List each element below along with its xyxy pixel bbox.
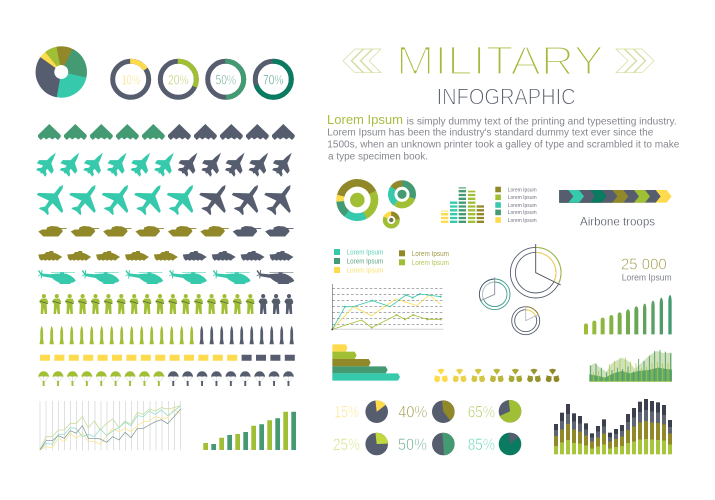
stat: 25 000: 25 000 — [621, 256, 667, 273]
intro paragraph — [327, 112, 680, 163]
line chart legend: Lorem Ipsum — [347, 268, 383, 274]
intro paragraph: Lorem Ipsum has been the industry's standard dummy text ever since the — [327, 128, 654, 139]
stacked arrow bars — [332, 344, 400, 381]
radial gauge: medium — [474, 274, 515, 315]
equalizer legend: Lorem Ipsum — [508, 203, 537, 209]
multi-ring donut: medium — [387, 179, 417, 209]
percent stat: 50%: 50% — [398, 436, 427, 454]
stacked bar chart — [554, 399, 672, 454]
icon row: dark crates — [242, 355, 295, 361]
percent stat: 25%: 25% — [333, 436, 360, 454]
icon row: soldiers — [39, 294, 293, 314]
line chart legend: Lorem Ipsum — [347, 258, 383, 266]
dense area and bar chart — [589, 350, 672, 382]
chart: green rising bars — [203, 412, 296, 450]
icon row: armoured vehicles — [38, 251, 293, 261]
icon row: transport planes — [31, 176, 303, 221]
chevron progress bar — [559, 190, 672, 203]
intro paragraph: 1500s, when an unknown printer took a galley of type and scrambled it to make — [327, 140, 680, 151]
icon row: tanks — [38, 226, 293, 236]
line chart legend: Lorem Ipsum — [412, 251, 449, 258]
arrows: left chevrons — [343, 49, 381, 73]
percent stat: 40%: 40% — [398, 404, 428, 422]
radial gauge: large — [510, 244, 561, 298]
donut 50% — [208, 61, 244, 97]
icon row: missiles — [40, 326, 294, 344]
icon row: fighter jets — [33, 147, 299, 179]
intro paragraph: is simply dummy text of the printing and typesetting industry. — [407, 116, 677, 127]
donut 50%: 50% — [216, 72, 236, 88]
rising missile bars — [584, 295, 672, 334]
equalizer bar chart — [445, 187, 480, 223]
line chart legend: Lorem Ipsum — [412, 260, 449, 267]
percent stat: 40% — [398, 400, 455, 423]
percent stat: 65%: 65% — [468, 404, 495, 422]
line chart legend — [334, 249, 449, 274]
percent stat: 15%: 15% — [334, 404, 359, 422]
equalizer legend: Lorem Ipsum — [508, 187, 537, 193]
percent stat: 65% — [468, 400, 521, 423]
radiation icons row — [434, 369, 559, 382]
intro paragraph: Lorem Ipsum — [327, 112, 403, 127]
icon row: supply crates — [40, 355, 237, 361]
donut 20% — [160, 61, 196, 97]
subtitle: INFOGRAPHIC — [437, 84, 576, 110]
arrows: right chevrons — [616, 49, 654, 73]
stat label: Lorem Ipsum — [622, 273, 672, 283]
equalizer legend: Lorem Ipsum — [508, 210, 537, 216]
donut 70% — [255, 61, 291, 97]
percent stat: 50% — [398, 433, 455, 455]
donut 70%: 70% — [263, 72, 284, 88]
percent stat: 25% — [333, 433, 388, 455]
intro paragraph: a type specimen book. — [328, 152, 428, 163]
donut 10% — [113, 61, 149, 97]
percent stat: 15% — [334, 400, 388, 423]
icon row: parachutes — [38, 371, 294, 386]
donut 10%: 10% — [122, 72, 140, 88]
chart: multi-line trend with vertical grid — [40, 401, 181, 450]
label: airbone troops: Airbone troops — [580, 215, 655, 229]
percent stat: 85% — [468, 433, 521, 455]
equalizer legend — [495, 187, 537, 224]
multi-ring donut: large — [333, 176, 381, 224]
donut 20%: 20% — [168, 72, 188, 88]
title: MILITARY — [396, 37, 604, 83]
equalizer legend: Lorem Ipsum — [508, 195, 537, 201]
line chart — [331, 284, 443, 330]
radial gauge: small — [512, 306, 540, 335]
main pie chart — [38, 49, 84, 95]
icon row: helicopters — [38, 270, 294, 284]
equalizer legend: Lorem Ipsum — [508, 218, 537, 224]
multi-ring donut: small — [383, 211, 400, 229]
icon row: stealth bombers — [38, 124, 295, 140]
line chart legend: Lorem Ipsum — [347, 250, 383, 256]
percent stat: 85%: 85% — [468, 436, 495, 454]
